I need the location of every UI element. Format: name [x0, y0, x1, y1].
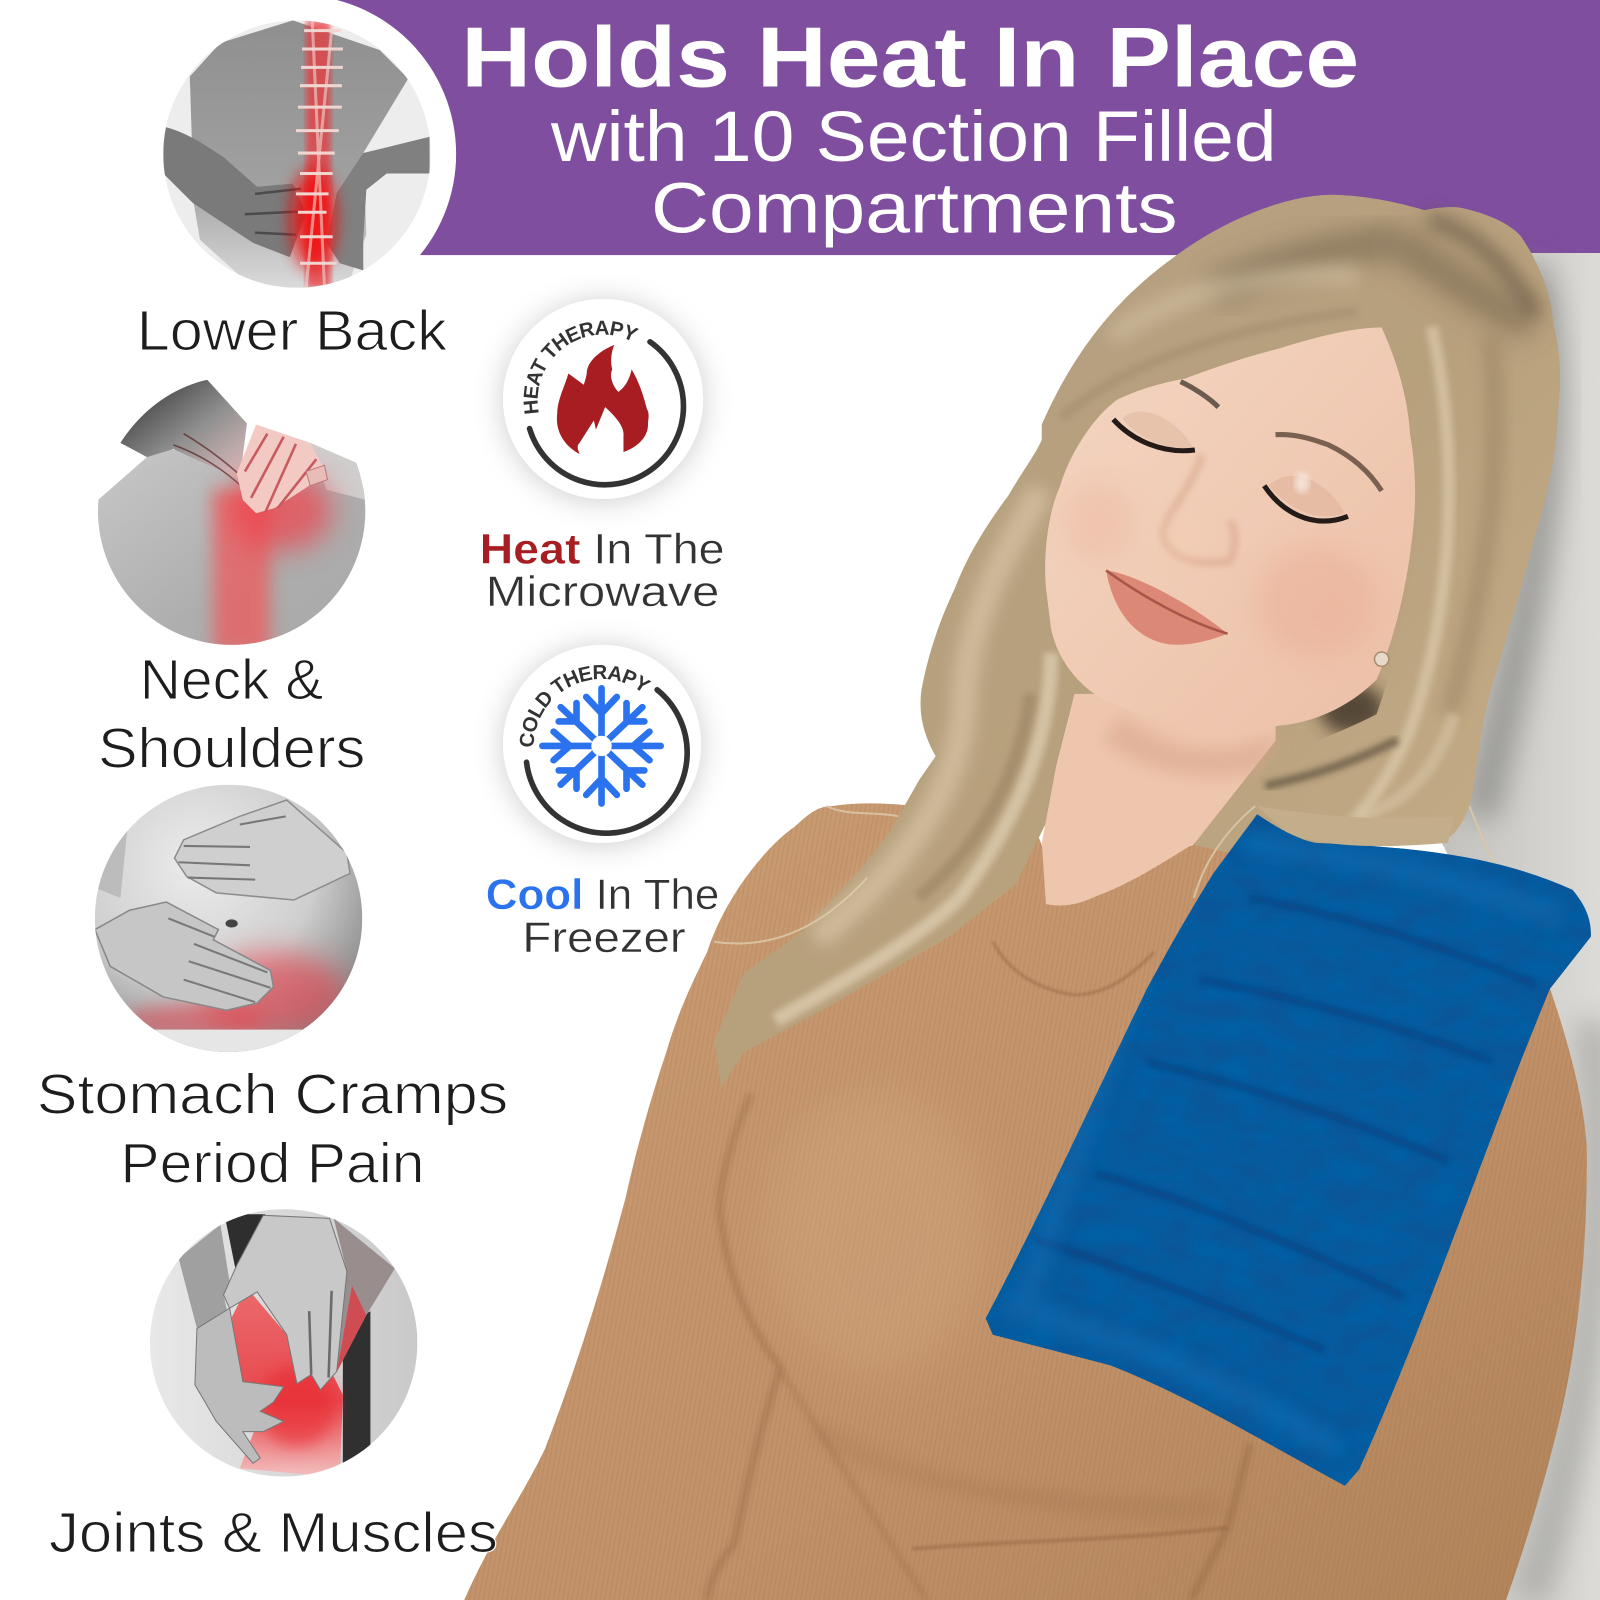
eye left [1122, 412, 1195, 450]
label: Cool In The Freezer: Freezer [522, 914, 686, 962]
title: Compartments [651, 169, 1178, 249]
icon: neck and shoulders circle [98, 378, 366, 653]
heat pack [969, 796, 1600, 1500]
face [1045, 327, 1415, 729]
label: Stomach Cramps Period Pain [37, 1062, 508, 1195]
label: Neck and Shoulders [98, 648, 365, 779]
label: Neck and Shoulders: Shoulders [98, 716, 365, 779]
badge: heat therapy [490, 288, 716, 514]
cheek blush [1255, 546, 1378, 658]
title [461, 10, 1359, 249]
icon: joints circle [150, 1209, 417, 1478]
icon: stomach circle [95, 785, 362, 1055]
title: Holds Heat In Place [461, 10, 1359, 106]
label: Heat In The Microwave: Heat In The [480, 525, 724, 573]
hair wisps [714, 806, 1500, 943]
sweater shading [707, 1094, 781, 1600]
title: with 10 Section Filled [550, 97, 1277, 177]
photo: woman with heat pack [464, 195, 1600, 1600]
banner [0, 0, 1600, 313]
label: Cool In The Freezer: Cool In The [486, 871, 719, 919]
label: Lower Back: Lower Back [137, 299, 448, 362]
label: Stomach Cramps Period Pain: Period Pain [120, 1132, 424, 1195]
hair lying over pack [1257, 806, 1454, 846]
label: Joints and Muscles: Joints & Muscles [49, 1501, 498, 1564]
label: Heat In The Microwave: Microwave [486, 568, 719, 616]
badge: cold therapy [490, 634, 714, 858]
icon: flame [557, 345, 649, 454]
hair [714, 195, 1560, 1088]
icon: lower back circle [163, 20, 431, 288]
neck [1042, 694, 1276, 906]
label: Heat In The Microwave [480, 525, 724, 616]
label: Cool In The Freezer [486, 871, 719, 962]
nose [1163, 454, 1235, 563]
sweater [464, 803, 1587, 1600]
label: Stomach Cramps Period Pain: Stomach Cramps [37, 1062, 508, 1125]
hair strands and shading [776, 219, 1536, 1020]
label: Neck and Shoulders: Neck & [140, 648, 323, 711]
right curtain and fringe of hair [1042, 195, 1560, 838]
lips [1106, 570, 1228, 645]
icon: snowflake [542, 688, 661, 804]
earring [1374, 652, 1389, 666]
dark hair shadow by ear [1319, 684, 1385, 735]
eye right [1268, 476, 1345, 516]
badge: cold therapy: COLD THERAPY [520, 665, 652, 747]
badge: heat therapy: HEAT THERAPY [524, 320, 639, 414]
couch [1429, 253, 1600, 1600]
